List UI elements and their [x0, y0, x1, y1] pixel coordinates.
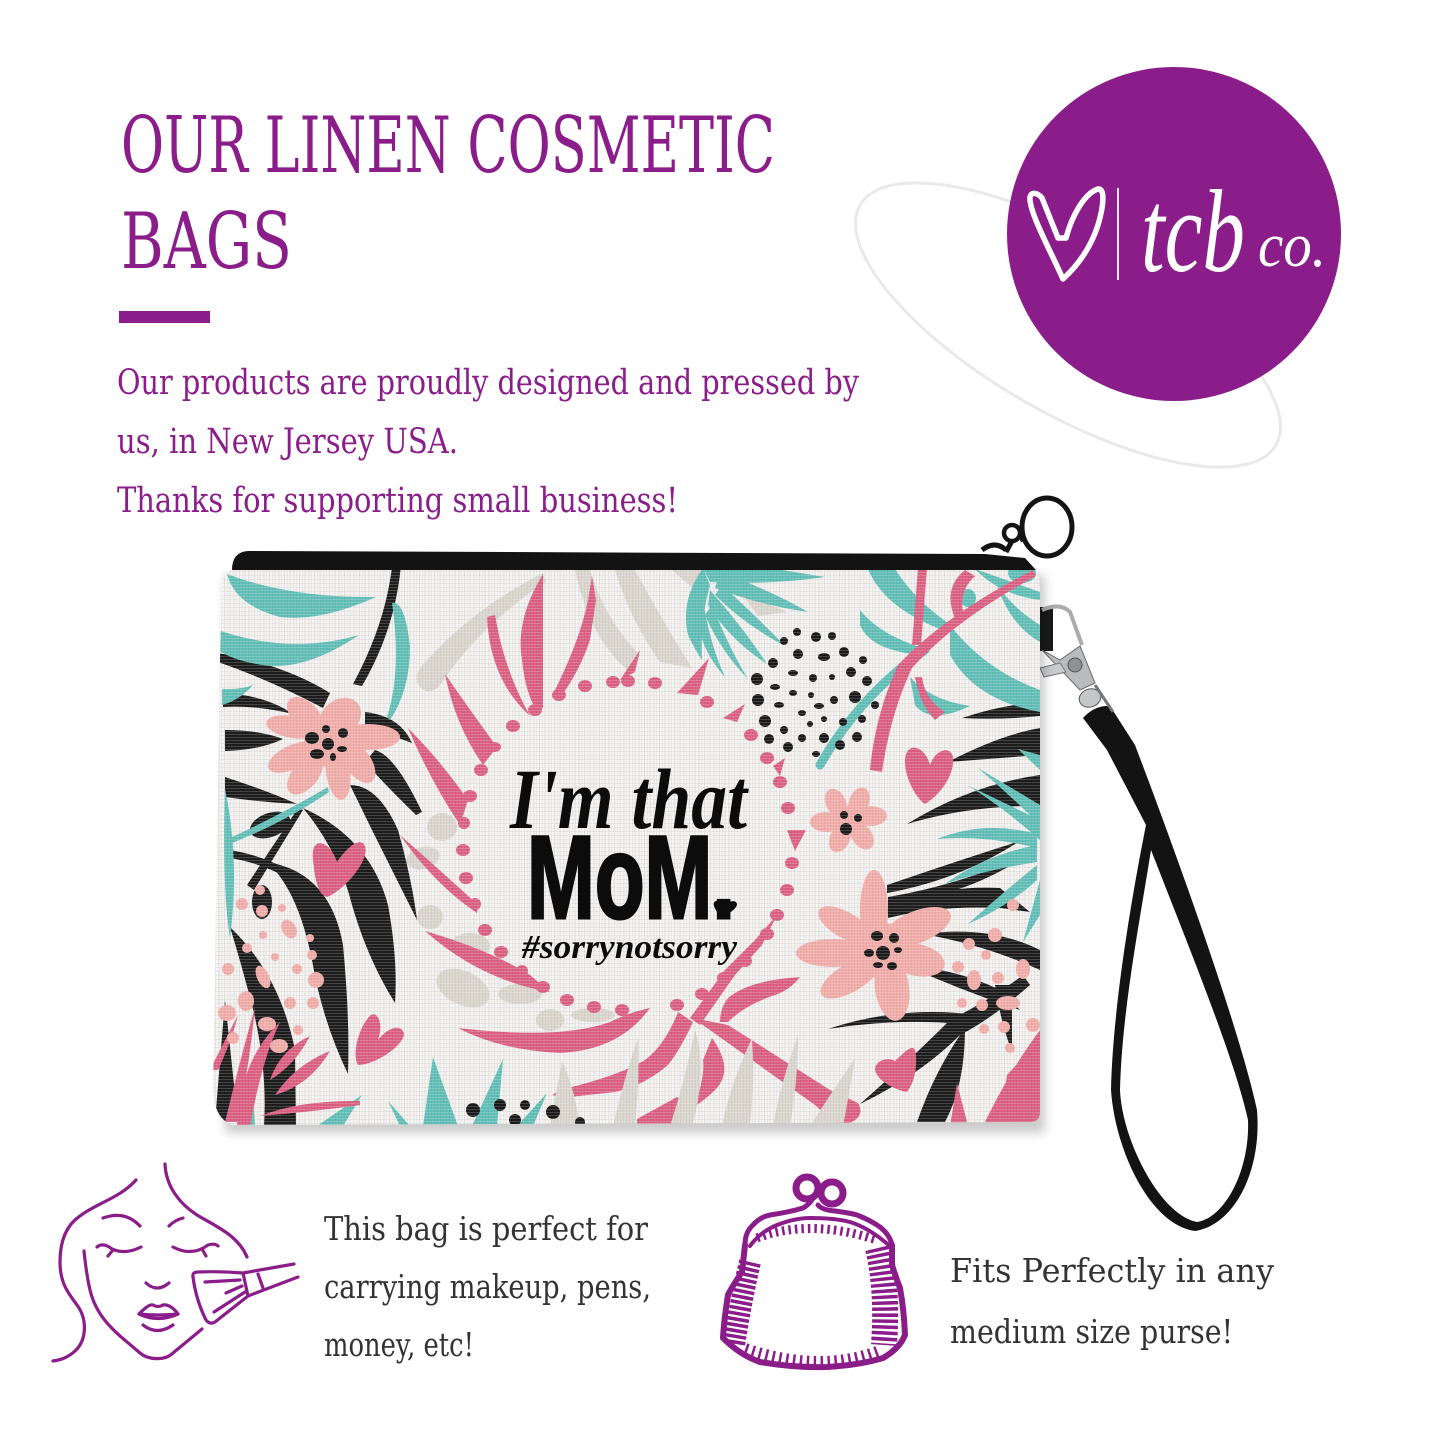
flower: small centre right	[810, 784, 887, 856]
text: purse fit: Fits Perfectly in any	[950, 1251, 1274, 1290]
bag slogan: I'm that	[509, 751, 750, 847]
intro text: Thanks for supporting small business!	[117, 481, 678, 521]
bag slogan	[509, 751, 750, 966]
zipper tape	[232, 551, 1036, 570]
bag slogan: MoM.	[527, 812, 735, 944]
flower: left	[263, 689, 400, 801]
teal leaves	[218, 563, 1040, 1126]
heart: left lower	[356, 1014, 404, 1065]
beige fronds	[404, 570, 788, 1031]
bottom centre branches	[720, 977, 800, 1022]
pink stem	[870, 570, 1036, 772]
intro text: Our products are proudly designed and pressed by	[117, 363, 859, 403]
bag fabric print	[200, 560, 1060, 1130]
title: OUR LINEN COSMETIC	[121, 101, 775, 191]
background orbit ring	[816, 129, 1320, 521]
text: bag use: This bag is perfect for	[324, 1209, 648, 1248]
zipper ring and pull	[982, 498, 1072, 556]
heart: right lower	[875, 1048, 916, 1092]
intro text: us, in New Jersey USA.	[117, 422, 458, 462]
pink dotted ring	[456, 675, 799, 1025]
linen weave overlay	[200, 560, 1060, 1130]
heart: left upper	[313, 842, 366, 897]
logo heart icon	[1030, 189, 1103, 279]
teal stem	[820, 650, 925, 765]
text: bag use	[324, 1209, 651, 1364]
black dot cluster	[466, 628, 879, 1127]
cosmetic bag	[200, 551, 1060, 1133]
metal clasp	[1039, 606, 1113, 712]
beige spikes over pink	[550, 1030, 855, 1126]
heart: right upper	[905, 748, 953, 804]
icon: face with makeup brush	[53, 1164, 298, 1361]
text: bag use: carrying makeup, pens,	[324, 1267, 651, 1306]
black leaves right	[828, 702, 1040, 1122]
pink leaves and stems	[210, 568, 1040, 1126]
title: BAGS	[121, 197, 292, 287]
text: bag use: money, etc!	[324, 1325, 474, 1364]
black leaves left	[215, 565, 422, 1126]
logo wordmark: co.	[1258, 212, 1326, 280]
intro text	[117, 363, 859, 521]
logo wordmark: tcb	[1141, 166, 1245, 297]
logo badge	[1007, 67, 1341, 401]
text: purse fit	[950, 1251, 1274, 1351]
title underline	[119, 311, 210, 323]
bag slogan: #sorrynotsorry	[521, 929, 738, 966]
logo divider	[1117, 188, 1119, 280]
title	[121, 101, 775, 287]
salmon dots	[218, 885, 1040, 1053]
bag shadow	[225, 575, 1045, 1133]
wrist strap	[1083, 706, 1258, 1231]
text: purse fit: medium size purse!	[950, 1312, 1233, 1351]
icon: coin purse	[723, 1177, 905, 1367]
flower: large right	[796, 870, 956, 1023]
